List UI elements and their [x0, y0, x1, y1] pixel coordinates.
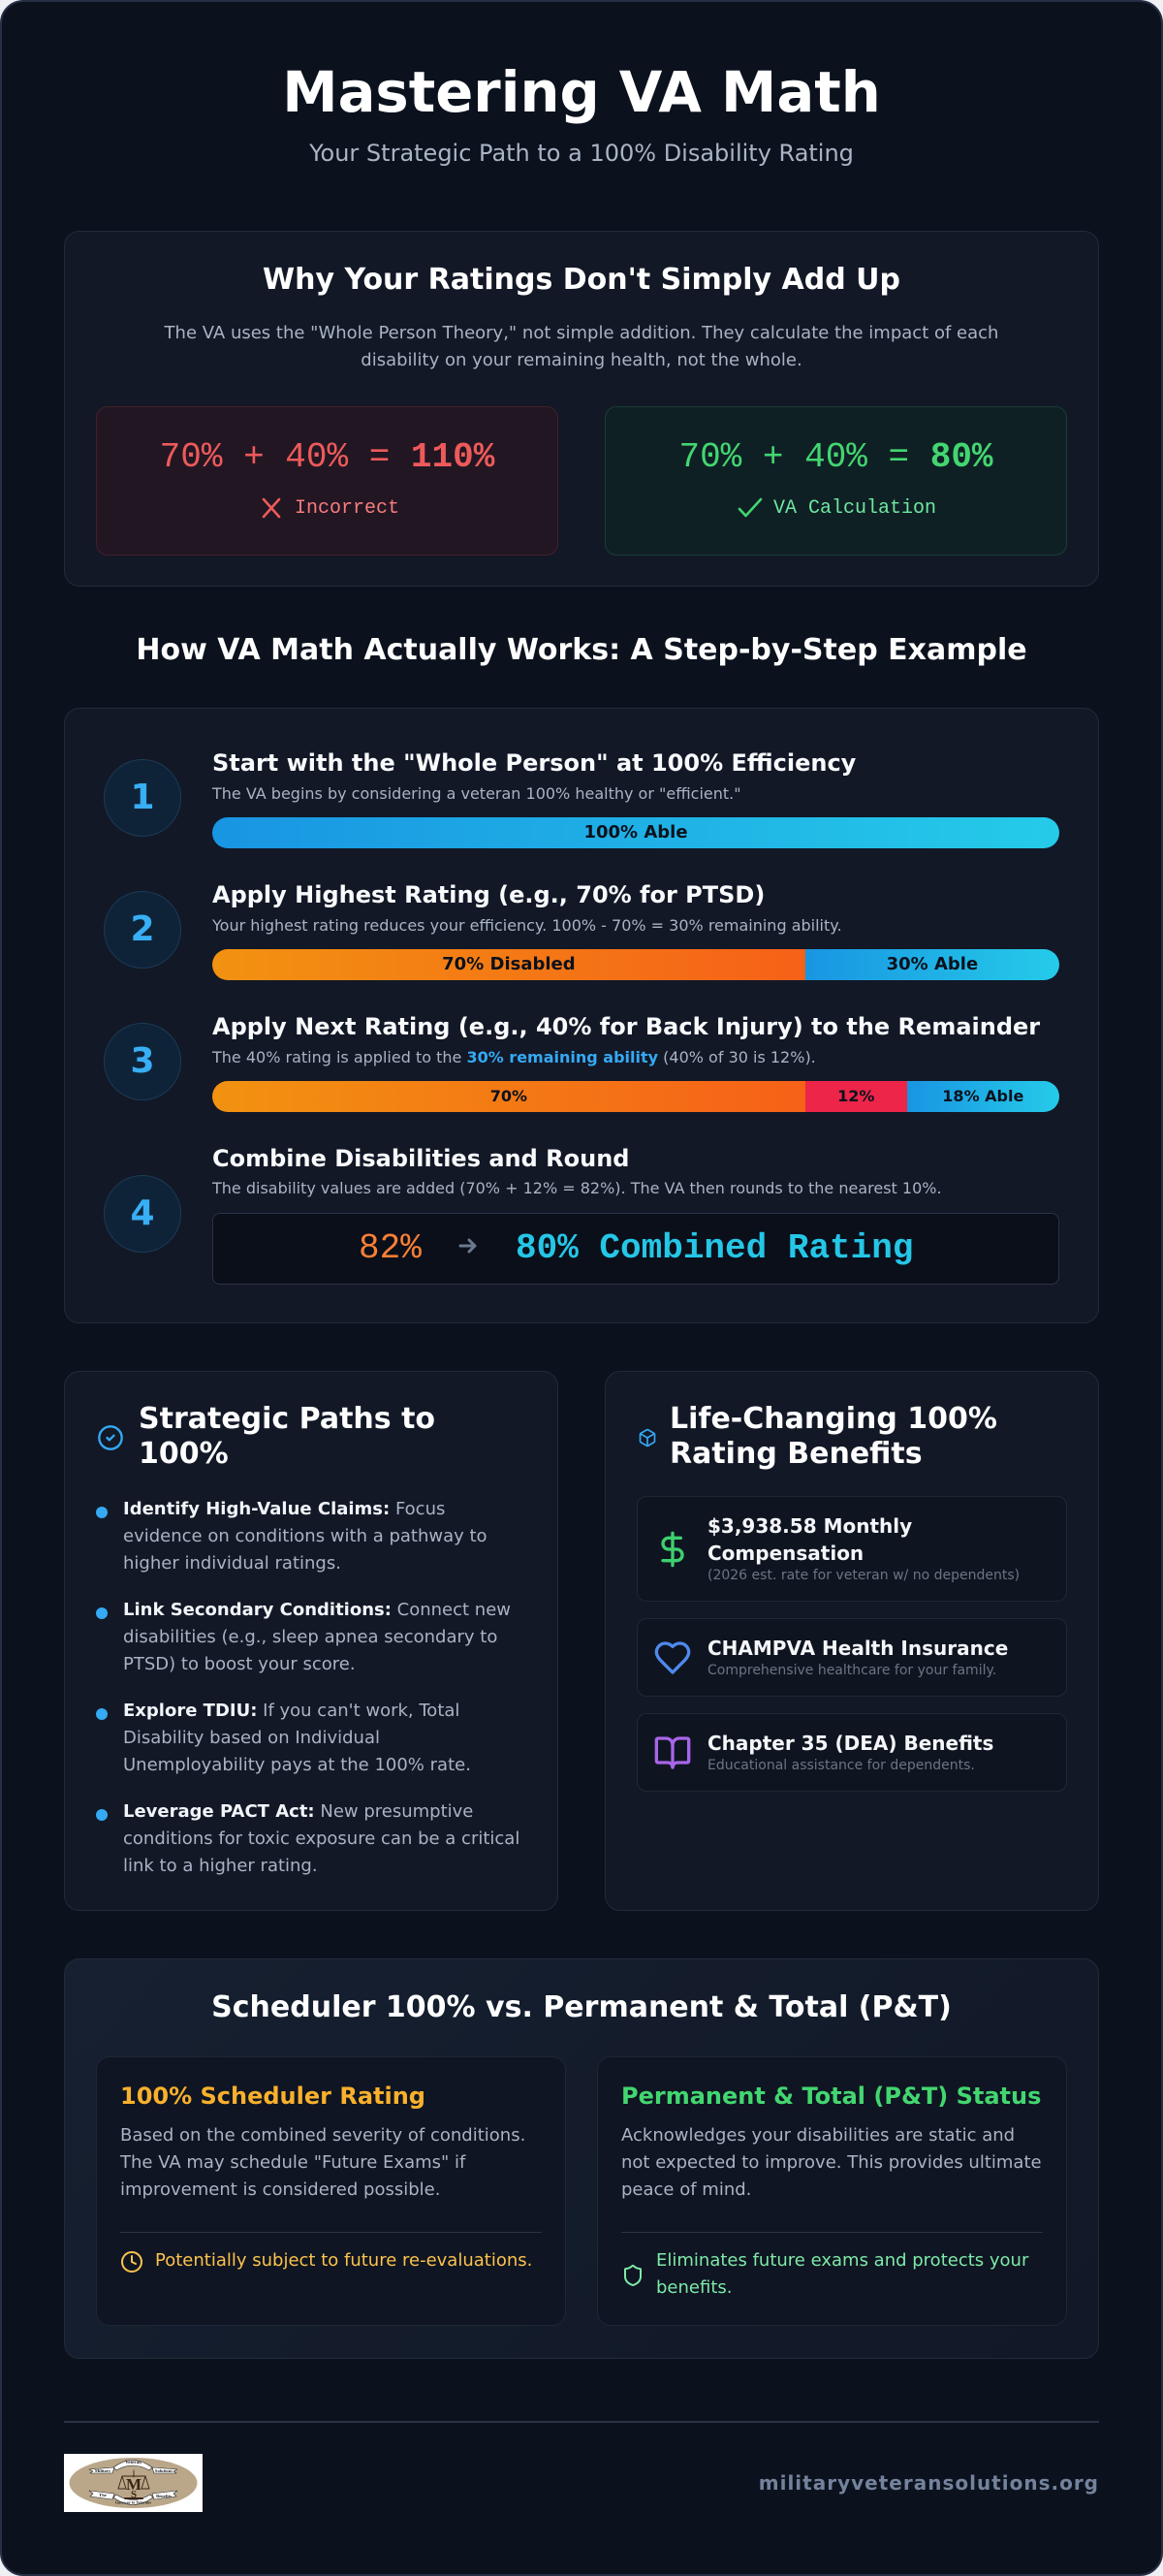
- scheduler body: [120, 2125, 525, 2200]
- CHAMPVA note: Comprehensive healthcare for your family.: [707, 1663, 996, 1678]
- correct formula: 70% + 40% = 80%: [678, 437, 993, 477]
- icon: circle check: [98, 1425, 123, 1450]
- step 1 description: The VA begins by considering a veteran 100% healthy or "efficient.": [212, 784, 741, 803]
- incorrect formula: 70% + 40% = 110%: [160, 437, 494, 477]
- step 3 bar: 18% Able: [942, 1087, 1023, 1105]
- heading: Why Your Ratings Don't Simply Add Up: [263, 263, 900, 297]
- heading: [139, 1402, 435, 1471]
- panel: strategic paths: [64, 1371, 558, 1911]
- panel: steps: [64, 708, 1099, 1323]
- icon: heart: [655, 1641, 690, 1674]
- card: scheduler: [96, 2056, 566, 2326]
- step 1 title: Start with the "Whole Person" at 100% Efficiency: [212, 749, 856, 777]
- combined rating box: [212, 1213, 1059, 1285]
- step 4 description: The disability values are added (70% + 12% = 82%). The VA then rounds to the nearest 10%.: [212, 1179, 942, 1197]
- step 2 bar: 70% Disabled: [442, 954, 576, 974]
- step 3 bar: 70%: [490, 1087, 527, 1105]
- bullet 2 text: disabilities (e.g., sleep apnea secondary to: [123, 1627, 497, 1647]
- P&T note: benefits.: [656, 2277, 732, 2298]
- subtitle: Your Strategic Path to a 100% Disability Rating: [309, 140, 854, 167]
- scheduler body: Based on the combined severity of conditions.: [120, 2125, 525, 2146]
- bullet 1 dot: [96, 1507, 108, 1518]
- step 4 title: Combine Disabilities and Round: [212, 1145, 629, 1172]
- bullet 3 dot: [96, 1708, 108, 1720]
- heading: Life-Changing 100%: [670, 1402, 997, 1436]
- bullet 3 text: [123, 1701, 471, 1775]
- step 3 bar: 12%: [837, 1087, 874, 1105]
- logo: Veteran: [125, 2461, 141, 2465]
- website: militaryveteransolutions.org: [759, 2471, 1099, 2495]
- bullet 1 text: [123, 1499, 487, 1574]
- intro text: disability on your remaining health, not the whole.: [361, 350, 802, 370]
- compensation title: [707, 1514, 912, 1565]
- bullet 2 dot: [96, 1607, 108, 1619]
- CHAMPVA title: CHAMPVA Health Insurance: [707, 1637, 1008, 1660]
- step 3 description: The 40% rating is applied to the 30% remaining ability (40% of 30 is 12%).: [212, 1048, 816, 1066]
- P&T body: not expected to improve. This provides ultimate: [621, 2152, 1042, 2173]
- P&T title: Permanent & Total (P&T) Status: [621, 2083, 1041, 2110]
- step 3 bar: [212, 1081, 1059, 1112]
- scheduler body: improvement is considered possible.: [120, 2179, 440, 2200]
- logo: Benefits: [156, 2494, 172, 2498]
- title: Mastering VA Math: [282, 60, 881, 125]
- 82 percent: 82%: [359, 1228, 422, 1268]
- benefit: CHAMPVA: [637, 1618, 1067, 1697]
- compensation title: Compensation: [707, 1542, 864, 1565]
- heading: Scheduler 100% vs. Permanent & Total (P&T): [211, 1990, 952, 2024]
- bullet 3 text: Unemployability pays at the 100% rate.: [123, 1755, 471, 1775]
- P&T note: Eliminates future exams and protects your: [656, 2250, 1028, 2271]
- scheduler title: 100% Scheduler Rating: [120, 2083, 425, 2110]
- P&T body: [621, 2125, 1042, 2200]
- logo: Gateway to Veterans: [115, 2499, 151, 2505]
- step 1 bar: 100% Able: [583, 822, 688, 843]
- intro text: The VA uses the "Whole Person Theory," not simple addition. They calculate the impact of each: [165, 323, 998, 343]
- icon: check mark: [739, 498, 762, 518]
- logo: Military: [95, 2468, 111, 2473]
- icon: box: [640, 1429, 655, 1447]
- P&T note: [656, 2250, 1029, 2298]
- benefit: compensation: [637, 1496, 1067, 1602]
- logo: [64, 2454, 203, 2512]
- step 2 number: [104, 891, 181, 969]
- bullet 4 text: conditions for toxic exposure can be a critical: [123, 1829, 519, 1849]
- bullet 1 text: evidence on conditions with a pathway to: [123, 1526, 487, 1546]
- compensation note: (2026 est. rate for veteran w/ no dependents): [707, 1568, 1020, 1583]
- compensation title: $3,938.58 Monthly: [707, 1514, 912, 1538]
- bullet 4 text: [123, 1801, 519, 1876]
- bullet 4 text: Leverage PACT Act: New presumptive: [123, 1801, 473, 1822]
- step 2 bar: [212, 949, 1059, 980]
- step 4 number: [104, 1175, 181, 1253]
- bullet 1 text: Identify High-Value Claims: Focus: [123, 1499, 445, 1519]
- bullet 2 text: [123, 1600, 511, 1674]
- incorrect formula card: [96, 406, 558, 556]
- panel: why ratings don't add up: [64, 231, 1099, 587]
- logo: The: [99, 2493, 107, 2497]
- incorrect label: Incorrect: [295, 497, 399, 520]
- P&T body: Acknowledges your disabilities are static and: [621, 2125, 1015, 2146]
- step 3 number: 3: [130, 1041, 155, 1081]
- step 2 description: Your highest rating reduces your efficiency. 100% - 70% = 30% remaining ability.: [212, 916, 842, 935]
- bullet 3 text: Explore TDIU: If you can't work, Total: [123, 1701, 459, 1721]
- benefit: chapter 35: [637, 1713, 1067, 1792]
- panel: scheduler vs P&T: [64, 1958, 1099, 2359]
- bullet 2 text: PTSD) to boost your score.: [123, 1654, 356, 1674]
- heading: step by step: How VA Math Actually Works: A Step-by-Step Example: [136, 633, 1027, 667]
- step 3 number: [104, 1023, 181, 1100]
- logo: S: [131, 2489, 137, 2500]
- chapter 35 note: Educational assistance for dependents.: [707, 1758, 975, 1773]
- scheduler body: The VA may schedule "Future Exams" if: [120, 2152, 465, 2173]
- VA calculation label: VA Calculation: [773, 497, 936, 520]
- bullet 3 text: Disability based on Individual: [123, 1728, 380, 1748]
- step 1 bar: [212, 817, 1059, 848]
- step 3 title: Apply Next Rating (e.g., 40% for Back Injury) to the Remainder: [212, 1013, 1040, 1040]
- icon: shield: [624, 2265, 642, 2286]
- scheduler note: Potentially subject to future re-evaluations.: [155, 2250, 532, 2271]
- correct formula card: [605, 406, 1067, 556]
- heading: Strategic Paths to: [139, 1402, 435, 1436]
- icon: book: [655, 1736, 690, 1769]
- arrow: [459, 1238, 477, 1253]
- step 1 number: [104, 759, 181, 837]
- logo: Solutions: [155, 2468, 173, 2473]
- step 2 bar: 30% Able: [887, 954, 978, 974]
- step 2 number: 2: [130, 909, 155, 949]
- heading: Rating Benefits: [670, 1437, 923, 1471]
- P&T body: peace of mind.: [621, 2179, 751, 2200]
- bullet 4 dot: [96, 1809, 108, 1821]
- heading: [670, 1402, 997, 1471]
- step 1 number: 1: [130, 778, 155, 817]
- bullet 2 text: Link Secondary Conditions: Connect new: [123, 1600, 511, 1620]
- step 4 number: 4: [130, 1193, 155, 1233]
- heading: 100%: [139, 1437, 229, 1471]
- icon: clock: [121, 2251, 142, 2273]
- card: permanent and total: [597, 2056, 1067, 2326]
- logo: M: [126, 2475, 141, 2494]
- bullet 4 text: link to a higher rating.: [123, 1856, 318, 1876]
- chapter 35 title: Chapter 35 (DEA) Benefits: [707, 1732, 993, 1755]
- step 2 title: Apply Highest Rating (e.g., 70% for PTSD): [212, 881, 765, 908]
- icon: x mark: [262, 498, 281, 518]
- panel: benefits: [605, 1371, 1099, 1911]
- 80 percent combined rating: 80% Combined Rating: [516, 1228, 913, 1268]
- intro text: [164, 323, 998, 370]
- icon: dollar: [661, 1532, 684, 1567]
- bullet 1 text: higher individual ratings.: [123, 1553, 341, 1574]
